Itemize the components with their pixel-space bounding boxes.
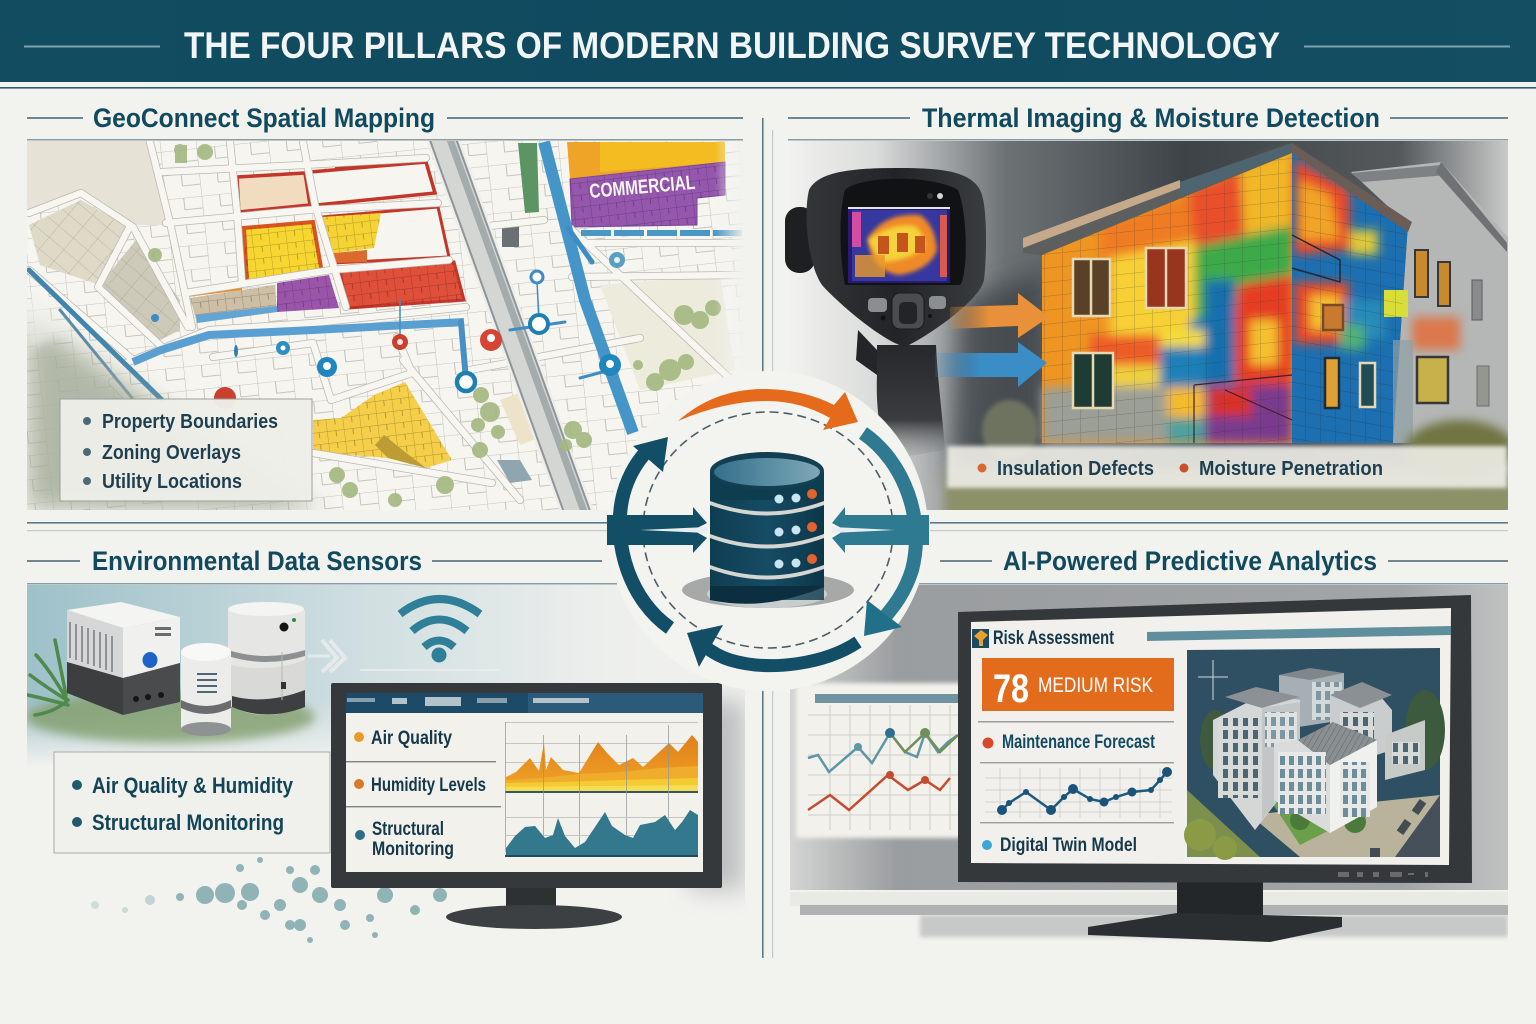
right tower: [1330, 690, 1392, 770]
lower yellow zone: [313, 382, 452, 468]
callout: sensor legend: Air Quality & Humidity: [92, 773, 294, 798]
roads: [29, 120, 742, 520]
icon: sensor box: [67, 602, 180, 715]
icon: wifi: [400, 599, 480, 662]
forecast line chart: [980, 762, 1174, 823]
callout: map legend: [60, 399, 312, 501]
front wall heat map: [1042, 150, 1292, 443]
structural monitoring chart: [505, 810, 698, 857]
sensors illustration: [25, 585, 745, 943]
thermal photo: [785, 141, 1515, 520]
panel: AI predictive analytics: [790, 546, 1508, 942]
icon: plant: [28, 640, 68, 715]
icon: data flow chevrons: [308, 640, 500, 672]
risk header: [972, 626, 1451, 649]
back tower: [1279, 673, 1344, 730]
dashboard labels: Air Quality: [371, 728, 452, 749]
dashboard labels: Monitoring: [372, 839, 454, 860]
digital twin building image: [1184, 648, 1445, 860]
decorative splatter: [91, 857, 476, 943]
callout: thermal legend: [947, 446, 1507, 488]
section dividers: [27, 118, 1508, 958]
callout: thermal legend: Moisture Penetration: [1199, 458, 1383, 480]
arrow: left input: [607, 507, 707, 553]
callout: sensor legend: Structural Monitoring: [92, 810, 284, 835]
risk score badge: [982, 658, 1174, 711]
highway: [436, 120, 580, 520]
callout: map legend: Utility Locations: [102, 471, 242, 493]
left tower: [1213, 695, 1300, 830]
maintenance forecast: Maintenance Forecast: [1002, 732, 1156, 753]
dashboard labels: Structural: [372, 819, 444, 840]
icon: tall sensor: [228, 602, 305, 715]
arrow: right arc: [863, 433, 916, 636]
background chart: [796, 683, 966, 838]
windows: [1073, 248, 1375, 408]
panel: GeoConnect spatial mapping: [27, 103, 745, 520]
roof: [1023, 143, 1292, 255]
shadow: [682, 572, 854, 608]
arrow: right input: [832, 507, 929, 553]
arrow: bottom arc: [687, 625, 858, 667]
heading: environmental sensors: Environmental Data Sensors: [92, 546, 422, 576]
illustration: risk dashboard monitor: [958, 595, 1472, 942]
panel: thermal imaging: [785, 103, 1515, 520]
icon: database cylinder: [707, 452, 827, 608]
digital twin label: Digital Twin Model: [1000, 835, 1137, 856]
map illustration: [27, 120, 745, 520]
icon: small cylinder sensor: [181, 643, 231, 736]
arrow: orange heat: [950, 293, 1049, 338]
illustration: thermal camera: [785, 168, 986, 460]
risk score badge: MEDIUM RISK: [1038, 674, 1153, 697]
camera screen: [848, 207, 950, 283]
trees: [148, 144, 721, 507]
hub halo: [608, 371, 928, 691]
arrow: blue moisture: [935, 342, 1047, 387]
risk score badge: 78: [993, 667, 1029, 711]
front tower: [1274, 740, 1330, 833]
header band: [0, 0, 1536, 89]
dashboard labels: [346, 728, 501, 860]
heading: GeoConnect: GeoConnect Spatial Mapping: [93, 103, 435, 133]
aerial fade: [27, 315, 320, 510]
map pins: [151, 252, 625, 409]
blue utility lines: [544, 142, 633, 433]
heading: AI analytics: AI-Powered Predictive Analytics: [1003, 546, 1377, 576]
COMMERCIAL label: COMMERCIAL: [589, 172, 696, 203]
callout: thermal legend: Insulation Defects: [997, 458, 1154, 480]
zoning blocks: [165, 141, 725, 468]
title: THE FOUR PILLARS OF MODERN BUILDING SURVEY TECHNOLOGY: [184, 25, 1280, 66]
dashboard labels: Humidity Levels: [371, 775, 486, 796]
AI illustration: [790, 585, 1508, 942]
central data hub: [607, 371, 929, 691]
heading: Thermal Imaging: Thermal Imaging & Moisture Detection: [922, 103, 1380, 133]
illustration: heat-mapped building: [982, 143, 1515, 480]
illustration: sensor dashboard monitor: [331, 683, 745, 929]
callout: map legend: Property Boundaries: [102, 411, 278, 433]
arrow: left arc: [620, 437, 670, 628]
callout: map legend: Zoning Overlays: [102, 442, 241, 464]
neighbouring grey wing: [1351, 162, 1515, 443]
side wall heat map: [1292, 150, 1408, 443]
callout: sensor legend: [54, 752, 330, 853]
risk header: Risk Assessment: [993, 628, 1115, 649]
camera buttons: [868, 298, 887, 312]
panel: environmental sensors: [25, 546, 745, 943]
monitor stand: [506, 888, 556, 910]
arrow: orange top arc: [678, 389, 858, 430]
dashed orbit: [643, 412, 893, 648]
air quality and humidity chart: [505, 722, 698, 852]
shrubs: [980, 398, 1038, 448]
